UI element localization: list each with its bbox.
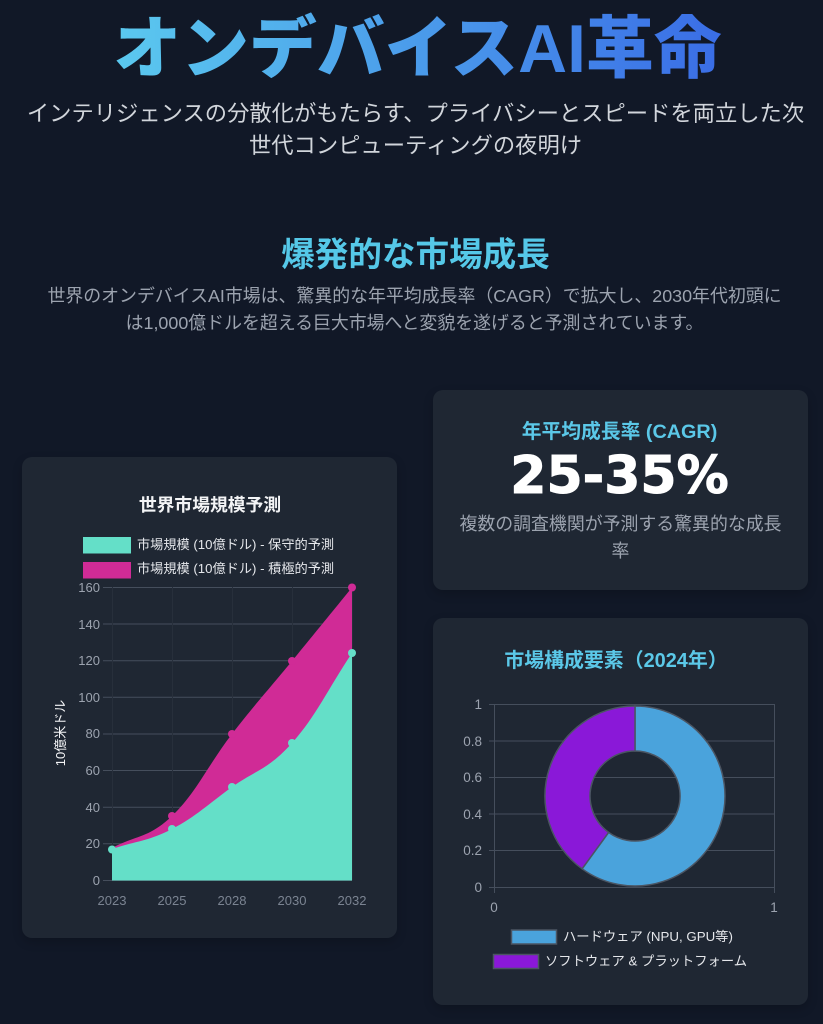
donut axis labels: 1 — [770, 900, 778, 915]
donut axis labels: 0 — [490, 900, 498, 915]
chart legend: 市場規模 (10億ドル) - 積極的予測 — [137, 561, 334, 576]
panel: CAGR stat — [433, 390, 808, 590]
donut axis labels: 0.8 — [463, 734, 482, 749]
x axis labels: 2023 — [98, 893, 126, 908]
CAGR heading: 年平均成長率 (CAGR) — [522, 421, 717, 443]
CAGR description: 複数の調査機関が予測する驚異的な成長 — [459, 514, 782, 534]
panel: market size forecast — [22, 457, 397, 938]
section heading: 爆発的な市場成長 — [281, 237, 550, 274]
donut title: 市場構成要素（2024年） — [504, 648, 728, 672]
y axis tick labels — [78, 580, 100, 888]
section intro text: は1,000億ドルを超える巨大市場へと変貌を遂げると予測されています。 — [126, 313, 703, 333]
CAGR description: 率 — [612, 541, 629, 561]
donut segment: software 40% — [545, 706, 635, 869]
donut legend — [494, 928, 747, 968]
CAGR value: 25-35% — [510, 446, 729, 506]
aggressive forecast area — [112, 584, 356, 880]
donut axis labels: 0.2 — [463, 843, 482, 858]
panel: market composition — [433, 618, 808, 1005]
section intro text: 世界のオンデバイスAI市場は、驚異的な年平均成長率（CAGR）で拡大し、2030年代初頭に — [47, 286, 782, 306]
y axis tick labels: 0 — [93, 873, 100, 888]
subtitle: インテリジェンスの分散化がもたらす、プライバシーとスピードを両立した次 — [27, 101, 804, 126]
donut legend: ハードウェア (NPU, GPU等) — [563, 928, 733, 944]
chart legend: 市場規模 (10億ドル) - 保守的予測 — [137, 537, 334, 552]
x axis labels: 2028 — [218, 893, 246, 908]
y axis tick labels: 40 — [86, 800, 100, 815]
donut axis labels: 0.4 — [463, 807, 482, 822]
donut axis labels: 0.6 — [463, 770, 482, 785]
subtitle: 世代コンピューティングの夜明け — [249, 133, 582, 158]
x axis labels: 2032 — [338, 893, 366, 908]
chart legend — [83, 537, 334, 578]
chart title: 世界市場規模予測 — [139, 495, 281, 515]
CAGR description — [459, 514, 782, 561]
x axis labels: 2025 — [158, 893, 186, 908]
subtitle — [27, 101, 804, 158]
y axis tick labels: 120 — [78, 653, 100, 668]
donut axis labels: 1 — [474, 697, 482, 712]
y axis tick labels: 20 — [86, 836, 100, 851]
donut segment: hardware 60% — [582, 706, 725, 886]
y axis tick labels: 140 — [78, 617, 100, 632]
title: オンデバイスAI革命 — [113, 12, 722, 87]
donut grid — [489, 704, 774, 893]
y axis tick labels: 80 — [86, 726, 100, 741]
conservative forecast area — [108, 649, 356, 880]
y axis tick labels: 100 — [78, 690, 100, 705]
section intro text — [47, 286, 782, 333]
y axis tick labels: 60 — [86, 763, 100, 778]
x axis labels — [98, 893, 366, 908]
donut axis labels — [463, 697, 778, 915]
y axis tick labels: 160 — [78, 580, 100, 595]
x axis labels: 2030 — [278, 893, 306, 908]
donut legend: ソフトウェア & プラットフォーム — [545, 954, 747, 968]
gridlines — [103, 587, 352, 880]
donut axis labels: 0 — [474, 880, 482, 895]
y axis title: 10億米ドル — [53, 700, 68, 766]
